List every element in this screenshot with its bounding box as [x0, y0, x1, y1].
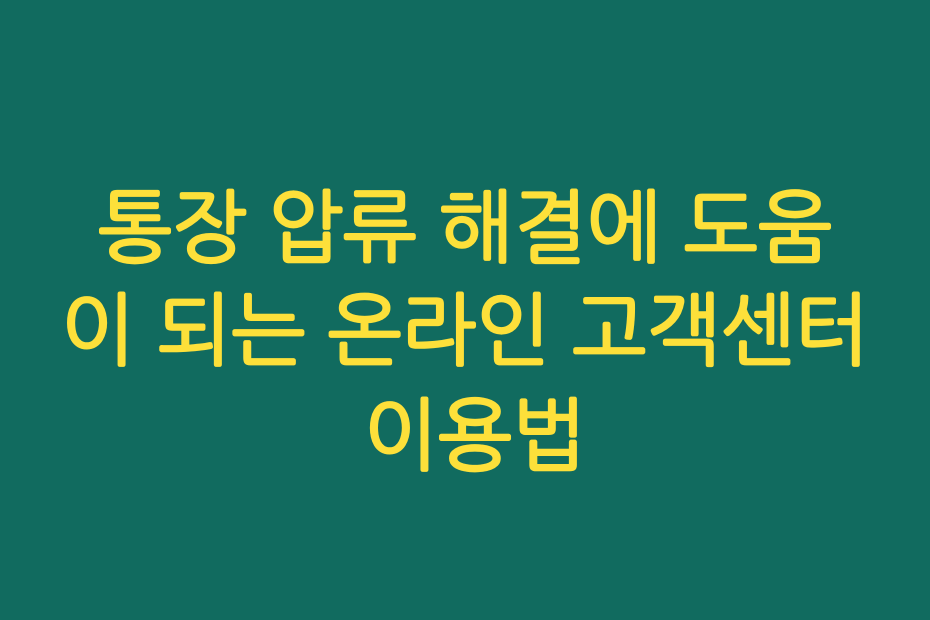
title: 이 되는 온라인 고객센터: [61, 286, 869, 375]
title: 이용법: [364, 391, 586, 480]
title: 통장 압류 해결에 도움: [98, 183, 832, 272]
title: [61, 183, 869, 480]
